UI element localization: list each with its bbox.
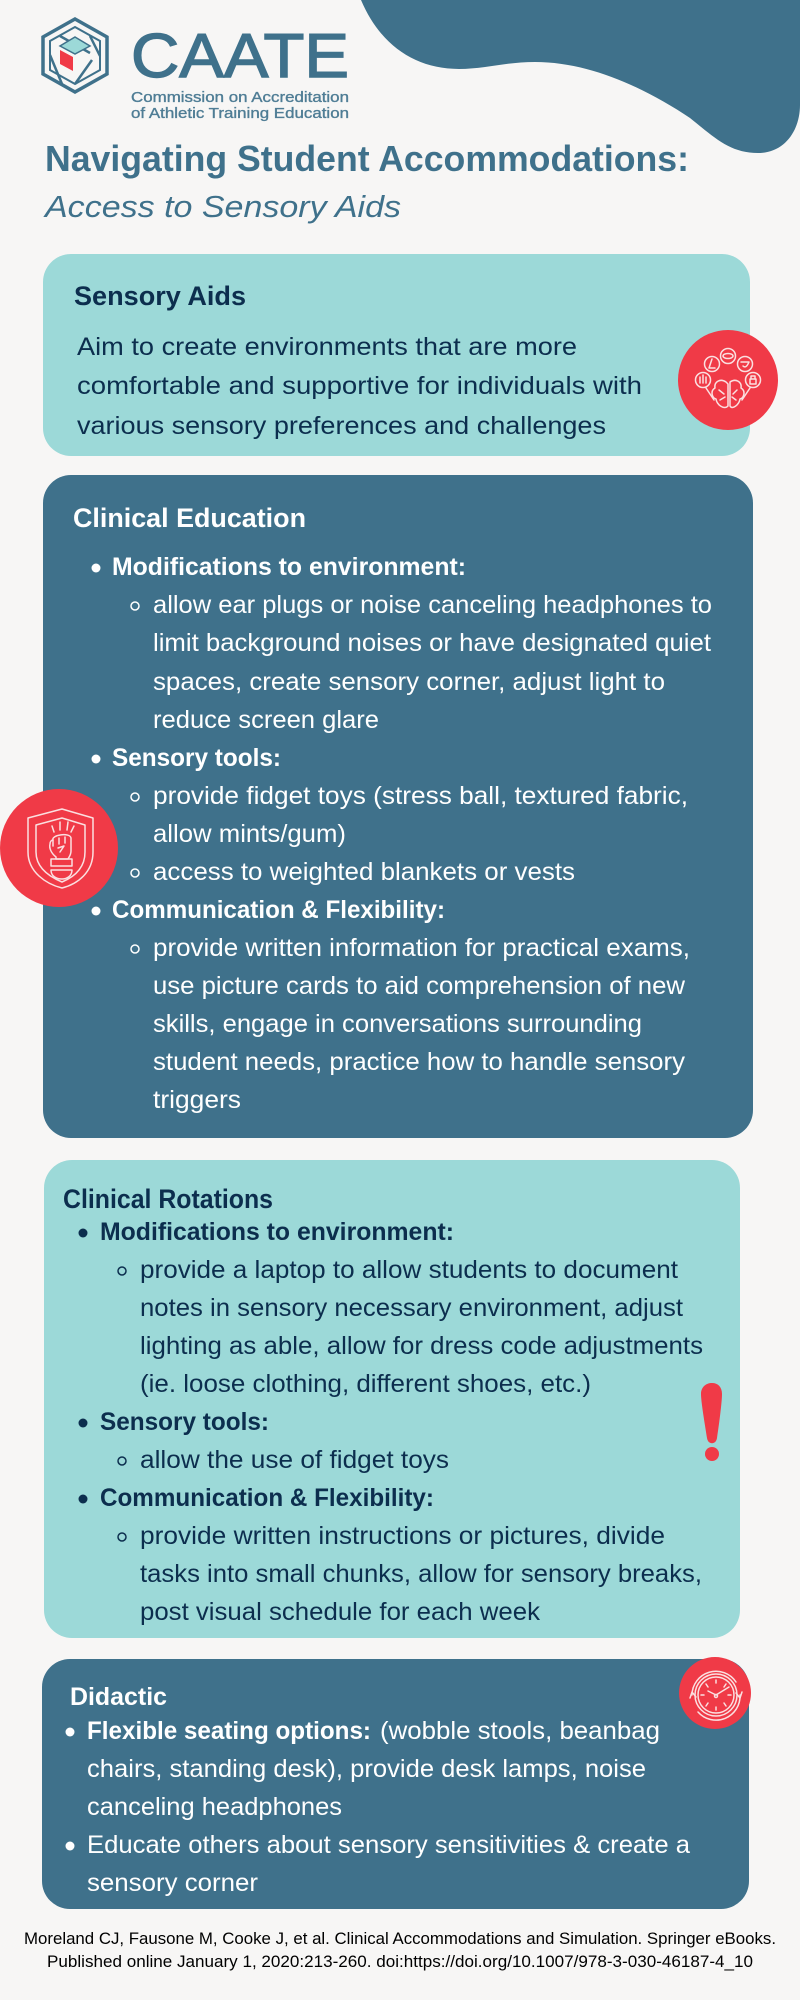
panel: Clinical Rotations — [44, 1160, 740, 1638]
icon: shield with raised fist — [0, 789, 118, 907]
icon: exclamation mark — [701, 1383, 722, 1461]
list: sensory tools — [92, 744, 688, 886]
list: modifications to environment: spaces, create sensory corner, adjust light to — [153, 668, 665, 696]
list: communication and flexibility: skills, engage in conversations surrounding — [153, 1010, 642, 1038]
list: modifications to environment — [78, 1218, 703, 1398]
list: modifications to environment: notes in sensory necessary environment, adjust — [140, 1294, 683, 1322]
list item: flexible seating: (wobble stools, beanbag — [380, 1717, 660, 1745]
heading: Didactic: Didactic — [70, 1683, 167, 1711]
list: communication and flexibility: Communication & Flexibility: — [112, 896, 445, 924]
list: modifications to environment: allow ear plugs or noise canceling headphones to — [153, 591, 712, 619]
list: sensory tools: Sensory tools: — [112, 744, 281, 772]
list: communication and flexibility — [92, 896, 690, 1114]
list: modifications to environment: reduce screen glare — [153, 706, 379, 734]
list: communication and flexibility: use picture cards to aid comprehension of new — [153, 972, 686, 1000]
list: sensory tools: provide fidget toys (stress ball, textured fabric, — [153, 782, 688, 810]
list: modifications to environment: lighting as able, allow for dress code adjustments — [140, 1332, 703, 1360]
list: sensory tools: allow mints/gum) — [153, 820, 346, 848]
heading: Clinical Rotations: Clinical Rotations — [63, 1184, 273, 1214]
text block: aim: Aim to create environments that are more — [77, 333, 577, 361]
heading: Sensory Aids: Sensory Aids — [74, 281, 246, 311]
list item: educate others: sensory corner — [87, 1869, 258, 1897]
citation — [24, 1929, 776, 1971]
text block: aim: comfortable and supportive for individuals with — [77, 372, 642, 400]
decorative wave shape — [361, 0, 800, 153]
list item: flexible seating: canceling headphones — [87, 1793, 342, 1821]
list item: flexible seating: Flexible seating options: — [87, 1717, 371, 1745]
subtitle: Access to Sensory Aids — [43, 189, 401, 224]
list: modifications to environment: (ie. loose clothing, different shoes, etc.) — [140, 1370, 591, 1398]
list: communication and flexibility: triggers — [153, 1086, 241, 1114]
heading: Clinical Education: Clinical Education — [73, 503, 306, 533]
citation: Published online January 1, 2020:213-260. doi:https://doi.org/10.1007/978-3-030-46187-4_10 — [47, 1952, 753, 1971]
list: modifications to environment: Modifications to environment: — [100, 1218, 454, 1246]
list: modifications to environment — [92, 553, 712, 734]
list: communication and flexibility: student needs, practice how to handle sensory — [153, 1048, 686, 1076]
list: communication and flexibility: provide written instructions or pictures, divide — [140, 1522, 665, 1550]
list: sensory tools: allow the use of fidget toys — [140, 1446, 449, 1474]
panel: Sensory Aids — [43, 254, 778, 456]
list: sensory tools — [78, 1408, 449, 1474]
panel: Clinical Education — [43, 475, 753, 1138]
logo wordmark: CAATE — [131, 22, 349, 91]
panel: Didactic — [42, 1657, 751, 1909]
list: modifications to environment: provide a laptop to allow students to document — [140, 1256, 678, 1284]
list item: educate others: Educate others about sensory sensitivities & create a — [87, 1831, 690, 1859]
text block: aim: various sensory preferences and challenges — [77, 412, 606, 440]
list item: flexible seating — [66, 1717, 660, 1821]
icon: brain and five senses — [678, 330, 778, 430]
list: sensory tools: access to weighted blankets or vests — [153, 858, 575, 886]
list: communication and flexibility: tasks into small chunks, allow for sensory breaks, — [140, 1560, 702, 1588]
list: communication and flexibility: Communication & Flexibility: — [100, 1484, 434, 1512]
list item: educate others — [66, 1831, 690, 1897]
list: communication and flexibility: post visual schedule for each week — [140, 1598, 541, 1626]
title: Navigating Student Accommodations: — [45, 138, 689, 179]
logo icon — [43, 19, 107, 92]
icon: clock with circular arrows — [679, 1657, 751, 1729]
citation: Moreland CJ, Fausone M, Cooke J, et al. Clinical Accommodations and Simulation. Springer eBooks. — [24, 1929, 776, 1948]
list: communication and flexibility: provide written information for practical exams, — [153, 934, 690, 962]
list: communication and flexibility — [78, 1484, 702, 1626]
logo subtitle — [131, 90, 349, 122]
logo: CAATE — [43, 19, 349, 122]
text block: aim — [77, 333, 642, 440]
list: sensory tools: Sensory tools: — [100, 1408, 269, 1436]
logo subtitle: of Athletic Training Education — [131, 106, 349, 122]
logo subtitle: Commission on Accreditation — [131, 90, 349, 106]
list: modifications to environment: limit background noises or have designated quiet — [153, 629, 711, 657]
list: modifications to environment: Modifications to environment: — [112, 553, 466, 581]
list item: flexible seating: chairs, standing desk), provide desk lamps, noise — [87, 1755, 646, 1783]
